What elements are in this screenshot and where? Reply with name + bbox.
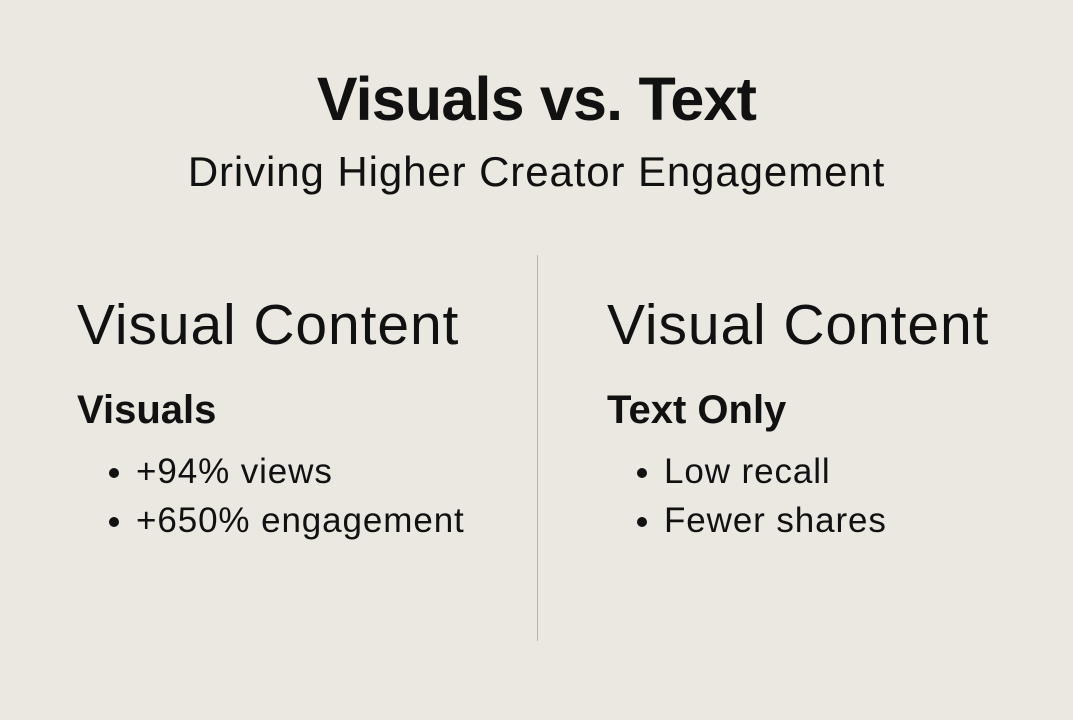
right heading: Visual Content (607, 293, 989, 357)
panel: right (607, 293, 989, 540)
right subheading: Text Only (607, 388, 786, 432)
bullet: fewer shares: Fewer shares (664, 501, 887, 540)
title: Visuals vs. Text (317, 65, 756, 133)
left heading: Visual Content (77, 293, 459, 357)
bullet: engagement: +650% engagement (136, 501, 465, 540)
left subheading: Visuals (77, 388, 216, 432)
panel: left (77, 293, 465, 540)
subtitle: Driving Higher Creator Engagement (188, 148, 885, 195)
bullet: views: +94% views (136, 452, 333, 491)
divider (537, 255, 538, 641)
bullet: low recall: Low recall (664, 452, 831, 491)
